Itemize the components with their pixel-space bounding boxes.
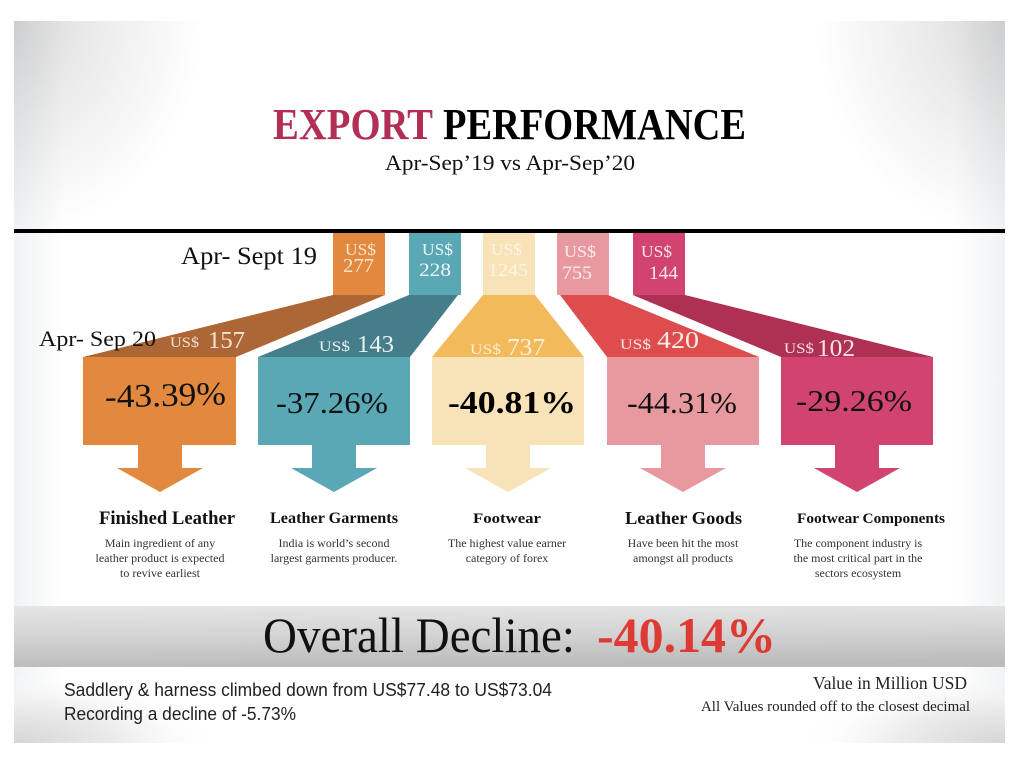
column: Finished Leather: US$	[170, 335, 200, 351]
column: Leather Garments: 143	[357, 332, 394, 358]
column: Leather Goods: Have been hit the most	[628, 536, 739, 550]
legend: Apr-Sept 19: Apr- Sept 19	[181, 243, 317, 270]
column: Footwear Components: Footwear Components	[797, 511, 945, 527]
column: Finished Leather: Finished Leather	[99, 508, 236, 529]
column: Footwear: category of forex	[466, 551, 548, 565]
column: Leather Goods: US$	[620, 337, 652, 353]
column: Footwear	[432, 233, 584, 565]
column: Leather Goods: -44.31%	[627, 385, 737, 420]
column: Finished Leather: 277	[343, 255, 374, 277]
column: Finished Leather	[83, 233, 385, 580]
column: Finished Leather: US$	[345, 240, 376, 259]
column: Footwear: -40.81%	[448, 384, 576, 420]
column: Leather Goods: 755	[562, 263, 592, 284]
overall decline band: Overall Decline:	[263, 607, 575, 663]
column: Finished Leather: -43.39%	[104, 376, 226, 416]
column: Footwear Components: 102	[817, 336, 855, 362]
subtitle: Apr-Sep’19 vs Apr-Sep’20	[385, 150, 635, 175]
column: Leather Garments: Leather Garments	[270, 510, 398, 527]
column: Footwear Components: The component industry is	[794, 536, 922, 550]
column: Footwear Components: -29.26%	[796, 383, 912, 418]
column: Finished Leather: Main ingredient of any	[105, 536, 215, 550]
saddlery note: Recording a decline of -5.73%	[64, 704, 296, 724]
title: PERFORMANCE	[443, 100, 746, 149]
title	[273, 100, 746, 149]
column: Footwear: 737	[507, 335, 545, 361]
legend: Apr-Sep 20: Apr- Sep 20	[39, 326, 156, 351]
column: Leather Garments: India is world’s second	[279, 536, 389, 550]
column: Footwear: The highest value earner	[448, 536, 566, 550]
column: Leather Garments: 228	[419, 260, 451, 281]
column: Leather Goods: amongst all products	[633, 551, 733, 565]
overall decline band: -40.14%	[597, 607, 776, 663]
column: Leather Garments: US$	[319, 339, 351, 355]
column: Leather Garments: largest garments producer.	[271, 551, 397, 565]
divider bar	[14, 229, 1005, 233]
column: Leather Goods: 420	[657, 328, 699, 354]
column: Finished Leather: leather product is expected	[96, 551, 224, 565]
column: Footwear Components: 144	[649, 263, 679, 284]
column: Footwear: US$	[470, 342, 502, 358]
units note	[701, 673, 970, 715]
column: Leather Garments	[258, 233, 461, 565]
column: Footwear Components	[633, 233, 945, 580]
column: Leather Goods	[557, 233, 759, 565]
title: EXPORT	[273, 100, 433, 149]
column: Leather Goods: US$	[564, 242, 596, 261]
saddlery note: Saddlery & harness climbed down from US$77.48 to US$73.04	[64, 680, 552, 700]
units note: All Values rounded off to the closest decimal	[701, 699, 970, 715]
overall decline band	[14, 606, 1005, 667]
column: Footwear Components: US$	[641, 242, 672, 261]
column: Leather Garments: US$	[422, 240, 453, 259]
column: Footwear Components: sectors ecosystem	[815, 566, 902, 580]
column: Footwear: US$	[491, 240, 522, 259]
column: Footwear: 1245	[488, 260, 528, 280]
column: Finished Leather: to revive earliest	[120, 566, 201, 580]
column: Leather Goods: Leather Goods	[625, 508, 742, 528]
column: Footwear Components: US$	[784, 341, 815, 357]
column: Leather Garments: -37.26%	[276, 385, 388, 420]
saddlery note	[64, 680, 552, 724]
column: Finished Leather: 157	[208, 328, 245, 354]
column: Footwear Components: the most critical part in the	[794, 551, 922, 565]
column: Footwear: Footwear	[473, 511, 541, 527]
units note: Value in Million USD	[813, 673, 967, 693]
